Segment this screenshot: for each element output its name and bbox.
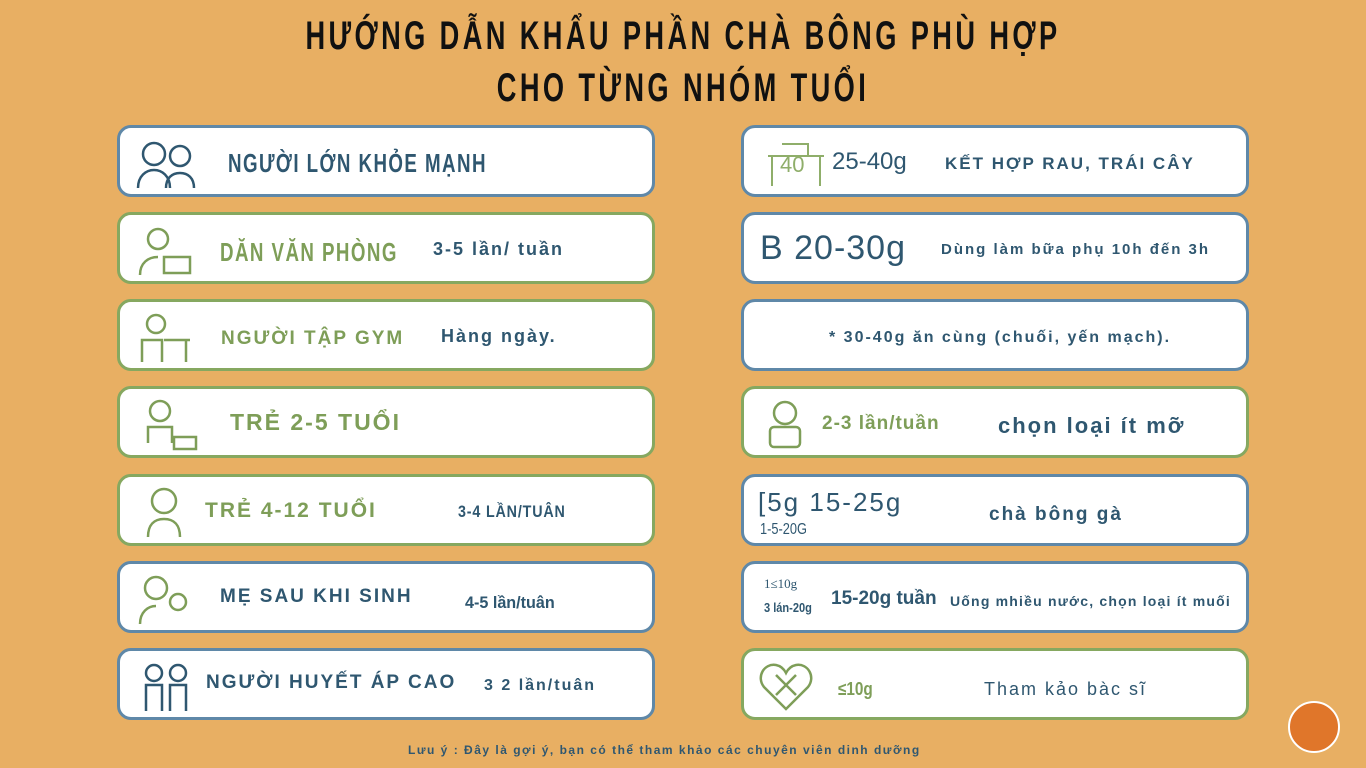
card: người lớn khỏe mạnh bbox=[117, 125, 655, 197]
icon: couple bbox=[136, 142, 196, 188]
label: TRẺ 4-12 TUỔI bbox=[205, 499, 377, 522]
logo bbox=[1288, 701, 1340, 753]
card: gym bbox=[117, 299, 655, 371]
amount: [5g 15-25g bbox=[758, 487, 902, 517]
card R2 bbox=[741, 212, 1249, 284]
icon: table bbox=[768, 143, 824, 186]
amount: 15-20g tuần bbox=[831, 588, 937, 609]
frequency: 2-3 lần/tuần bbox=[822, 413, 940, 434]
note: * 30-40g ăn cùng (chuối, yến mạch). bbox=[829, 329, 1171, 346]
frequency: 3 2 lần/tuân bbox=[484, 677, 596, 694]
card R7 bbox=[741, 648, 1249, 720]
label: NGƯỜI LỚN KHỎE MẠNH bbox=[228, 148, 487, 178]
amount: ≤10g bbox=[838, 679, 873, 699]
card R4 bbox=[741, 386, 1249, 458]
note: chọn loại ít mỡ bbox=[998, 413, 1185, 438]
icon: office bbox=[138, 228, 192, 275]
card: trẻ 4-12 bbox=[117, 474, 655, 546]
icon: elderly bbox=[144, 664, 188, 711]
icon: child bbox=[146, 400, 198, 450]
amount: 25-40g bbox=[832, 148, 907, 175]
icon: girl bbox=[146, 488, 182, 537]
small label 2: 3 lán-20g bbox=[764, 600, 812, 615]
frequency: 3-5 lần/ tuần bbox=[433, 239, 564, 259]
frequency: 4-5 lần/tuân bbox=[465, 593, 555, 612]
card R6 bbox=[741, 561, 1249, 633]
label: DĂN VĂN PHÒNG bbox=[220, 237, 398, 267]
card R3 bbox=[741, 299, 1249, 371]
note: Dùng làm bữa phụ 10h đến 3h bbox=[941, 241, 1210, 258]
footnote: Lưu ý : Đây là gợi ý, bạn có thể tham khảo các chuyên viên dinh dưỡng bbox=[408, 743, 921, 757]
sub amount: 1-5-20G bbox=[760, 521, 807, 538]
label: TRẺ 2-5 TUỔI bbox=[230, 409, 401, 435]
title bbox=[305, 13, 1061, 110]
frequency: 3-4 LẦN/TUÂN bbox=[458, 502, 566, 521]
note: Tham kảo bàc sĩ bbox=[984, 679, 1147, 699]
card: mẹ sau sinh bbox=[117, 561, 655, 633]
small label: 1≤10g bbox=[764, 576, 797, 591]
note: chà bông gà bbox=[989, 504, 1123, 525]
amount: B 20-30g bbox=[760, 229, 906, 267]
icon: mother bbox=[138, 576, 188, 624]
note: Uống mhiều nước, chọn loại ít muối bbox=[950, 593, 1231, 609]
card R5 bbox=[741, 474, 1249, 546]
note: KẾT HỢP RAU, TRÁI CÂY bbox=[945, 154, 1195, 173]
icon: table: 40 bbox=[780, 152, 804, 177]
icon: desk person bbox=[140, 314, 190, 362]
label: NGƯỜI HUYẾT ÁP CAO bbox=[206, 672, 456, 693]
title: CHO TỪNG NHÓM TUỔI bbox=[497, 66, 869, 110]
label: MẸ SAU KHI SINH bbox=[220, 586, 413, 607]
icon: child backpack bbox=[768, 400, 802, 448]
frequency: Hàng ngày. bbox=[441, 326, 557, 346]
card: huyết áp bbox=[117, 648, 655, 720]
title: HƯỚNG DẪN KHẨU PHẦN CHÀ BÔNG PHÙ HỢP bbox=[305, 14, 1061, 58]
card: văn phòng bbox=[117, 212, 655, 284]
card R1 bbox=[741, 125, 1249, 197]
label: NGƯỜI TẬP GYM bbox=[221, 328, 404, 349]
card: trẻ 2-5 bbox=[117, 386, 655, 458]
icon: heart x bbox=[760, 664, 812, 711]
